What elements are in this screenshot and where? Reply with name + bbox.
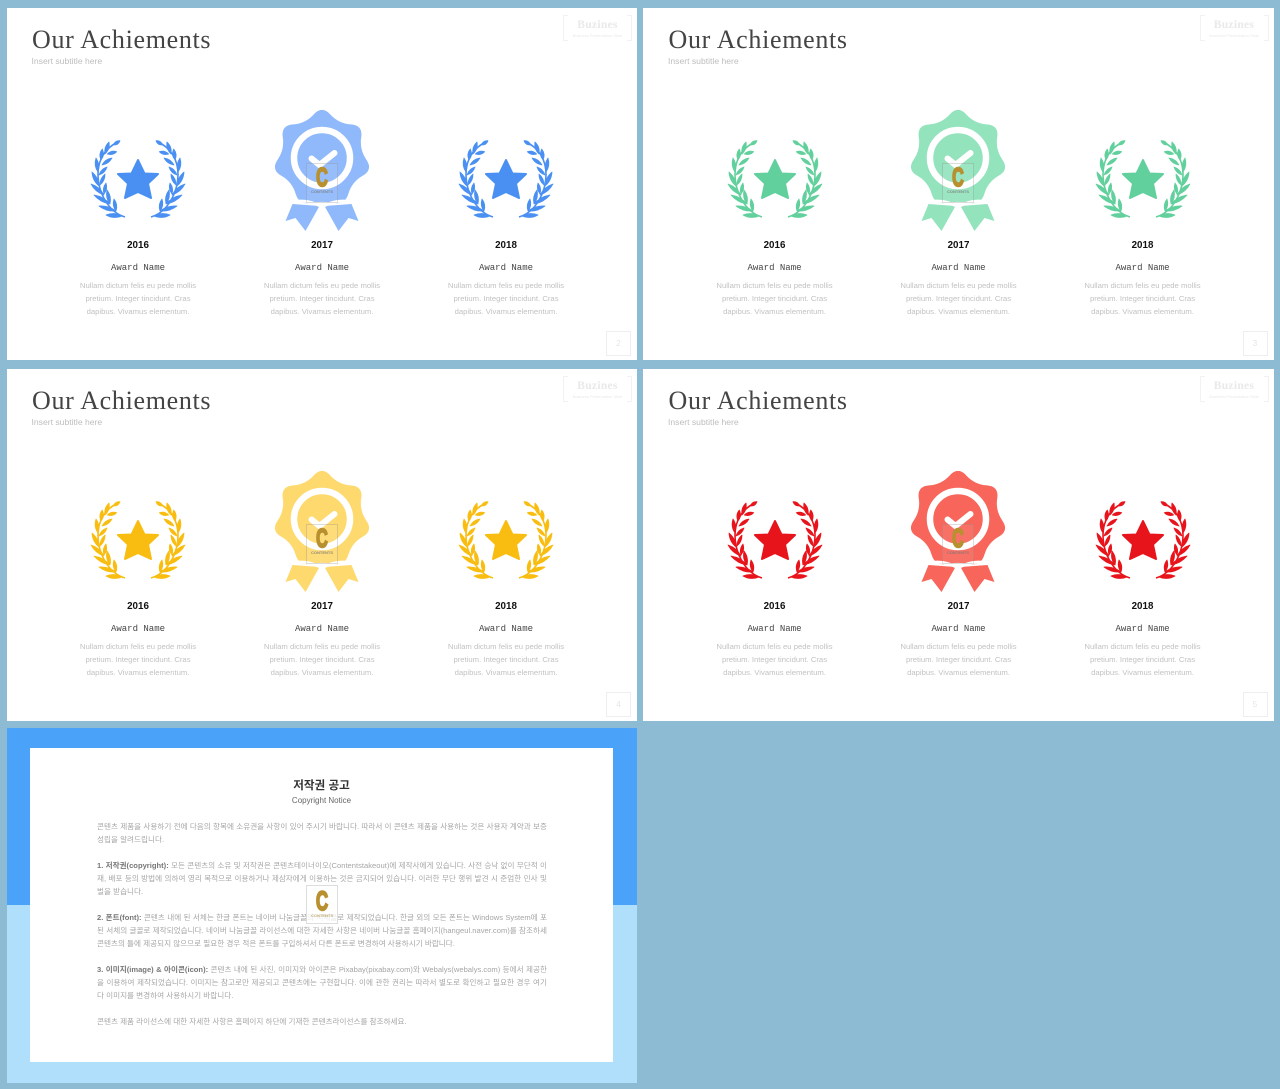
award column 2017 bbox=[264, 110, 380, 316]
description bbox=[448, 642, 564, 677]
description: dapibus. Vivamus elementum. bbox=[1091, 668, 1194, 677]
icon: laurel wreath with star bbox=[728, 501, 822, 579]
logo bbox=[1200, 376, 1268, 402]
heading: copyright notice Korean: 저작권 공고 bbox=[293, 779, 350, 792]
page number: 2 bbox=[616, 339, 621, 348]
award column 2016 bbox=[80, 501, 196, 677]
award column 2016 bbox=[716, 501, 833, 677]
notice body text: 콘텐츠 제품 라이선스에 대한 자세한 사항은 홈페이지 하단에 기재한 콘텐츠라이선스를 참조하세요. bbox=[97, 1017, 407, 1026]
description bbox=[1084, 281, 1201, 316]
logo: Buzines bbox=[1214, 19, 1254, 31]
panel: copyright notice slide bbox=[7, 728, 637, 1083]
panel: blue achievements slide bbox=[7, 8, 637, 360]
icon: laurel wreath with star bbox=[728, 140, 822, 218]
logo: Business Presentation Slide bbox=[1209, 33, 1259, 38]
award name: Award Name bbox=[479, 624, 533, 634]
award name: Award Name bbox=[295, 624, 349, 634]
subtitle: Insert subtitle here bbox=[32, 417, 102, 427]
notice body text: 벌을 받습니다. bbox=[97, 887, 143, 896]
panel: red achievements slide bbox=[644, 369, 1274, 721]
description bbox=[264, 281, 380, 316]
description bbox=[900, 281, 1017, 316]
description: pretium. Integer tincidunt. Cras bbox=[1090, 294, 1195, 303]
description: pretium. Integer tincidunt. Cras bbox=[85, 655, 191, 664]
panel: green achievements slide bbox=[644, 8, 1274, 360]
award name: Award Name bbox=[747, 624, 802, 634]
description bbox=[1084, 642, 1201, 677]
title: Our Achiements bbox=[668, 24, 848, 54]
icon: laurel wreath with star bbox=[1096, 501, 1190, 579]
logo bbox=[563, 376, 632, 402]
description: dapibus. Vivamus elementum. bbox=[907, 668, 1010, 677]
description: pretium. Integer tincidunt. Cras bbox=[722, 294, 827, 303]
page number bbox=[606, 331, 631, 356]
award column 2018 bbox=[448, 140, 564, 316]
icon: laurel wreath with star bbox=[90, 501, 186, 579]
award column 2016 bbox=[716, 140, 833, 316]
description: dapibus. Vivamus elementum. bbox=[723, 307, 826, 316]
description: dapibus. Vivamus elementum. bbox=[455, 668, 557, 677]
description: Nullam dictum felis eu pede mollis bbox=[1084, 281, 1201, 290]
award column 2017 bbox=[900, 110, 1017, 316]
icon: laurel wreath with star bbox=[458, 140, 554, 218]
description: Nullam dictum felis eu pede mollis bbox=[900, 642, 1017, 651]
description: Nullam dictum felis eu pede mollis bbox=[1084, 642, 1201, 651]
title: Our Achiements bbox=[32, 24, 211, 54]
logo: Buzines bbox=[1214, 380, 1254, 392]
description: dapibus. Vivamus elementum. bbox=[455, 307, 557, 316]
notice body text: 성립을 알려드립니다. bbox=[97, 835, 164, 844]
panel: yellow achievements slide bbox=[7, 369, 637, 721]
notice body text bbox=[97, 822, 547, 1026]
logo: Business Presentation Slide bbox=[573, 33, 622, 38]
page number: 3 bbox=[1253, 339, 1257, 348]
notice body text: 콘텐츠의 틀에 제공되지 않으므로 필요한 경우 적은 폰트를 구입하셔서 다른 폰트로 변경하여 사용하시기 바랍니다. bbox=[97, 939, 455, 948]
description: Nullam dictum felis eu pede mollis bbox=[448, 642, 564, 651]
logo: Buzines bbox=[577, 19, 618, 31]
year: 2016 bbox=[764, 600, 785, 612]
description: Nullam dictum felis eu pede mollis bbox=[448, 281, 564, 290]
year: 2016 bbox=[764, 240, 785, 250]
award name: Award Name bbox=[479, 263, 533, 273]
description: Nullam dictum felis eu pede mollis bbox=[80, 642, 196, 651]
description bbox=[716, 281, 833, 316]
award column 2018 bbox=[1084, 501, 1201, 677]
award column 2016 bbox=[80, 140, 196, 316]
year: 2017 bbox=[948, 600, 969, 612]
description: pretium. Integer tincidunt. Cras bbox=[269, 655, 375, 664]
icon: ribbon badge with check bbox=[274, 110, 370, 231]
description: pretium. Integer tincidunt. Cras bbox=[906, 294, 1011, 303]
logo bbox=[1200, 15, 1268, 41]
icon: ribbon badge with check: C bbox=[316, 523, 328, 553]
description: dapibus. Vivamus elementum. bbox=[271, 668, 373, 677]
icon: laurel wreath with star bbox=[1096, 140, 1190, 218]
description: dapibus. Vivamus elementum. bbox=[271, 307, 373, 316]
page number: 4 bbox=[616, 700, 621, 709]
watermark: C logo: CONTENTS bbox=[311, 913, 333, 918]
award name: Award Name bbox=[111, 624, 165, 634]
year: 2017 bbox=[311, 240, 333, 250]
description: dapibus. Vivamus elementum. bbox=[907, 307, 1010, 316]
logo bbox=[563, 15, 632, 41]
description: pretium. Integer tincidunt. Cras bbox=[906, 655, 1011, 664]
description: dapibus. Vivamus elementum. bbox=[87, 307, 189, 316]
award name: Award Name bbox=[747, 263, 802, 273]
description: Nullam dictum felis eu pede mollis bbox=[716, 281, 833, 290]
copyright card bbox=[30, 748, 613, 1062]
award name: Award Name bbox=[111, 263, 165, 273]
award column 2017 bbox=[264, 470, 380, 677]
logo: Business Presentation Slide bbox=[573, 394, 622, 399]
icon: ribbon badge with check bbox=[910, 110, 1006, 231]
award column 2018 bbox=[448, 501, 564, 677]
subtitle: Insert subtitle here bbox=[668, 56, 739, 66]
icon: ribbon badge with check: C bbox=[952, 523, 964, 553]
description bbox=[900, 642, 1017, 677]
icon: ribbon badge with check bbox=[910, 470, 1006, 592]
page number: 5 bbox=[1253, 700, 1257, 709]
page number bbox=[1242, 331, 1268, 356]
year: 2018 bbox=[1132, 600, 1153, 612]
title: Our Achiements bbox=[32, 386, 211, 414]
award column 2018 bbox=[1084, 140, 1201, 316]
description bbox=[448, 281, 564, 316]
subtitle: Insert subtitle here bbox=[32, 56, 102, 66]
description: pretium. Integer tincidunt. Cras bbox=[722, 655, 827, 664]
award column 2017 bbox=[900, 470, 1017, 677]
icon: ribbon badge with check bbox=[274, 470, 370, 592]
icon: ribbon badge with check: CONTENTS bbox=[310, 550, 333, 555]
description bbox=[716, 642, 833, 677]
icon: ribbon badge with check: CONTENTS bbox=[947, 550, 969, 555]
description: pretium. Integer tincidunt. Cras bbox=[453, 294, 559, 303]
award name: Award Name bbox=[931, 624, 986, 634]
year: 2016 bbox=[127, 600, 149, 612]
watermark: C logo: C bbox=[316, 886, 328, 916]
icon: ribbon badge with check: CONTENTS bbox=[947, 189, 969, 194]
award name: Award Name bbox=[931, 263, 986, 273]
icon: laurel wreath with star bbox=[90, 140, 186, 218]
notice body text: 다 이미지를 변경하여 사용하시기 바랍니다. bbox=[97, 991, 233, 1000]
year: 2018 bbox=[495, 600, 517, 612]
icon: laurel wreath with star bbox=[458, 501, 554, 579]
description: Nullam dictum felis eu pede mollis bbox=[900, 281, 1017, 290]
page number bbox=[1242, 692, 1268, 717]
icon: ribbon badge with check: C bbox=[952, 162, 964, 192]
description: dapibus. Vivamus elementum. bbox=[87, 668, 189, 677]
heading: copyright notice English: Copyright Notice bbox=[292, 796, 351, 805]
description bbox=[80, 281, 196, 316]
year: 2016 bbox=[127, 240, 149, 250]
description: pretium. Integer tincidunt. Cras bbox=[453, 655, 559, 664]
award name: Award Name bbox=[295, 263, 349, 273]
award name: Award Name bbox=[1115, 624, 1170, 634]
icon: ribbon badge with check: CONTENTS bbox=[310, 189, 333, 194]
description: pretium. Integer tincidunt. Cras bbox=[1090, 655, 1195, 664]
logo: Buzines bbox=[577, 380, 618, 392]
description: Nullam dictum felis eu pede mollis bbox=[264, 642, 380, 651]
description: dapibus. Vivamus elementum. bbox=[723, 668, 826, 677]
description: Nullam dictum felis eu pede mollis bbox=[80, 281, 196, 290]
icon: ribbon badge with check: C bbox=[316, 162, 328, 192]
description bbox=[80, 642, 196, 677]
subtitle: Insert subtitle here bbox=[668, 417, 739, 427]
year: 2017 bbox=[311, 600, 333, 612]
description: dapibus. Vivamus elementum. bbox=[1091, 307, 1194, 316]
title: Our Achiements bbox=[668, 386, 848, 414]
description: pretium. Integer tincidunt. Cras bbox=[269, 294, 375, 303]
description bbox=[264, 642, 380, 677]
description: pretium. Integer tincidunt. Cras bbox=[85, 294, 191, 303]
year: 2017 bbox=[948, 240, 969, 250]
year: 2018 bbox=[1132, 240, 1153, 250]
page number bbox=[606, 692, 631, 717]
logo: Business Presentation Slide bbox=[1209, 394, 1259, 399]
watermark: C logo bbox=[306, 885, 338, 924]
description: Nullam dictum felis eu pede mollis bbox=[264, 281, 380, 290]
year: 2018 bbox=[495, 240, 517, 250]
description: Nullam dictum felis eu pede mollis bbox=[716, 642, 833, 651]
award name: Award Name bbox=[1115, 263, 1170, 273]
